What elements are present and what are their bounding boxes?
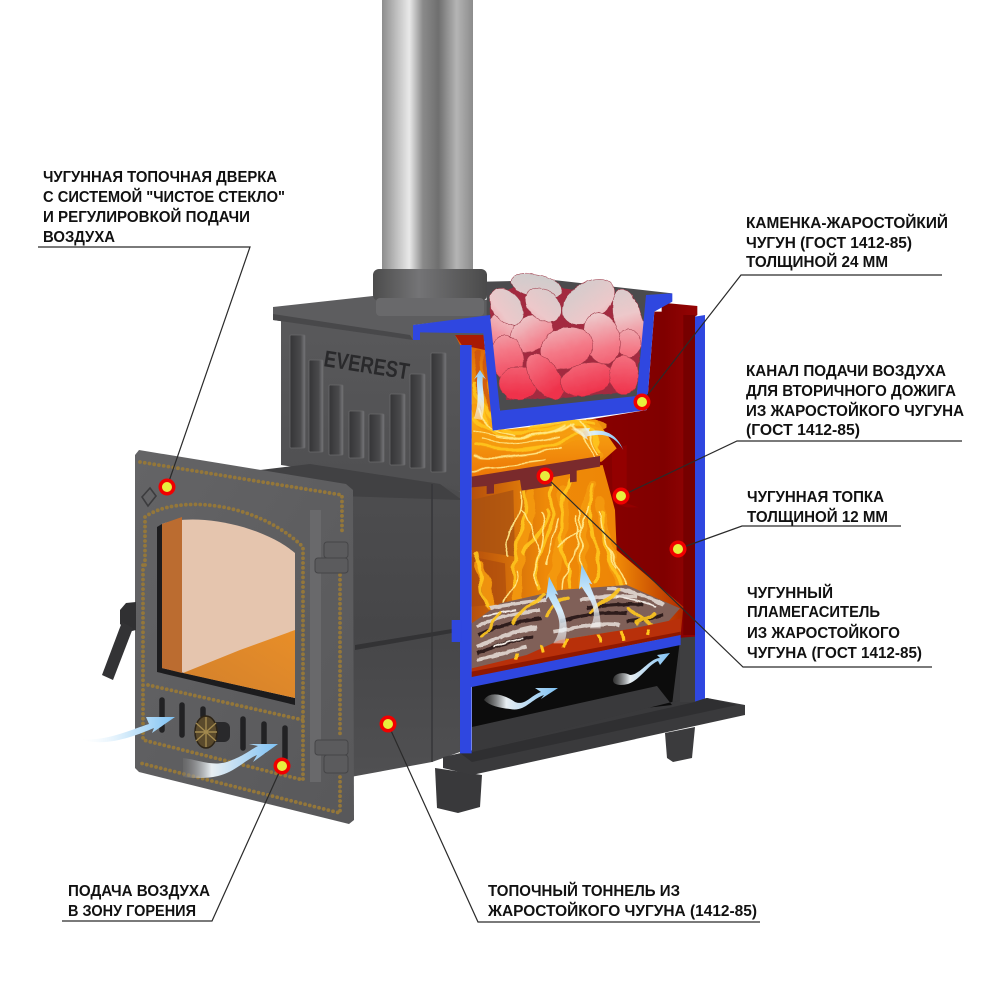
text block: firebox: ТОЛЩИНОЙ 12 ММ <box>747 508 888 526</box>
fins <box>290 335 446 472</box>
text block: heater stones: ЧУГУН (ГОСТ 1412-85) <box>746 235 912 252</box>
leader: tunnel <box>388 724 760 922</box>
marker dots <box>158 394 686 774</box>
text block: door: И РЕГУЛИРОВКОЙ ПОДАЧИ <box>43 208 250 226</box>
leader: door <box>38 247 250 487</box>
text block: flame damper <box>747 584 922 662</box>
section cut interior <box>413 270 705 753</box>
burning logs <box>472 585 681 677</box>
text block: door <box>43 169 285 246</box>
text block: tunnel: ТОПОЧНЫЙ ТОННЕЛЬ ИЗ <box>488 882 680 900</box>
air arrow <box>484 688 558 709</box>
firebox tunnel <box>260 464 462 778</box>
text block: air channel <box>746 363 964 439</box>
text block: flame damper: ИЗ ЖАРОСТОЙКОГО <box>747 624 900 642</box>
chimney pipe <box>373 0 487 316</box>
door hinges <box>315 542 348 773</box>
door window <box>157 517 295 705</box>
leader: flame damper <box>545 476 932 667</box>
text block: flame damper: ЧУГУННЫЙ <box>747 584 833 602</box>
text block: flame damper: ЧУГУНА (ГОСТ 1412-85) <box>747 645 922 662</box>
text block: tunnel: ЖАРОСТОЙКОГО ЧУГУНА (1412-85) <box>487 902 757 920</box>
door emblem <box>142 488 156 506</box>
text block: door: С СИСТЕМОЙ "ЧИСТОЕ СТЕКЛО" <box>43 188 285 206</box>
cradle behind stones <box>487 280 672 412</box>
leader: firebox <box>678 526 901 549</box>
base tray and legs <box>435 698 745 813</box>
leader: air supply <box>62 766 282 921</box>
text block: air channel: ИЗ ЖАРОСТОЙКОГО ЧУГУНА <box>746 402 964 420</box>
text block: air supply: ПОДАЧА ВОЗДУХА <box>68 883 210 900</box>
text block: firebox <box>747 489 888 526</box>
door air slots <box>162 700 285 758</box>
brand mark EVEREST: EVEREST <box>322 345 411 384</box>
red firebox walls <box>587 303 697 645</box>
leader: heater stones <box>642 275 942 402</box>
text block: heater stones: ТОЛЩИНОЙ 24 ММ <box>746 253 888 271</box>
text block: firebox: ЧУГУННАЯ ТОПКА <box>747 489 884 506</box>
text block: air channel: (ГОСТ 1412-85) <box>746 422 860 439</box>
text block: air channel: КАНАЛ ПОДАЧИ ВОЗДУХА <box>746 363 946 380</box>
text block: heater stones: КАМЕНКА-ЖАРОСТОЙКИЙ <box>746 214 948 232</box>
flame damper shelf <box>472 456 600 494</box>
text block: air channel: ДЛЯ ВТОРИЧНОГО ДОЖИГА <box>746 383 956 400</box>
ash chamber with air flow <box>472 632 695 752</box>
decorative beads <box>140 462 342 813</box>
leader: air channel <box>621 441 962 496</box>
air arrows at door <box>80 717 278 778</box>
stones <box>479 270 650 406</box>
text block: flame damper: ПЛАМЕГАСИТЕЛЬ <box>747 604 880 621</box>
fire upper chamber <box>455 335 617 477</box>
fire lower chamber <box>472 465 683 677</box>
text block: heater stones <box>746 214 948 271</box>
text block: air supply: В ЗОНУ ГОРЕНИЯ <box>68 903 196 920</box>
text block: door: ВОЗДУХА <box>43 229 115 246</box>
door handle <box>102 602 136 680</box>
air damper knob <box>195 716 230 748</box>
air arrows in fire <box>474 370 486 420</box>
text block: air supply <box>68 883 210 920</box>
text block: tunnel <box>487 882 757 920</box>
air arrow <box>613 653 670 685</box>
blue cut section <box>413 293 705 753</box>
cast-iron door <box>102 450 354 824</box>
upper body of stove with fins <box>273 296 490 492</box>
text block: door: ЧУГУННАЯ ТОПОЧНАЯ ДВЕРКА <box>43 169 277 186</box>
